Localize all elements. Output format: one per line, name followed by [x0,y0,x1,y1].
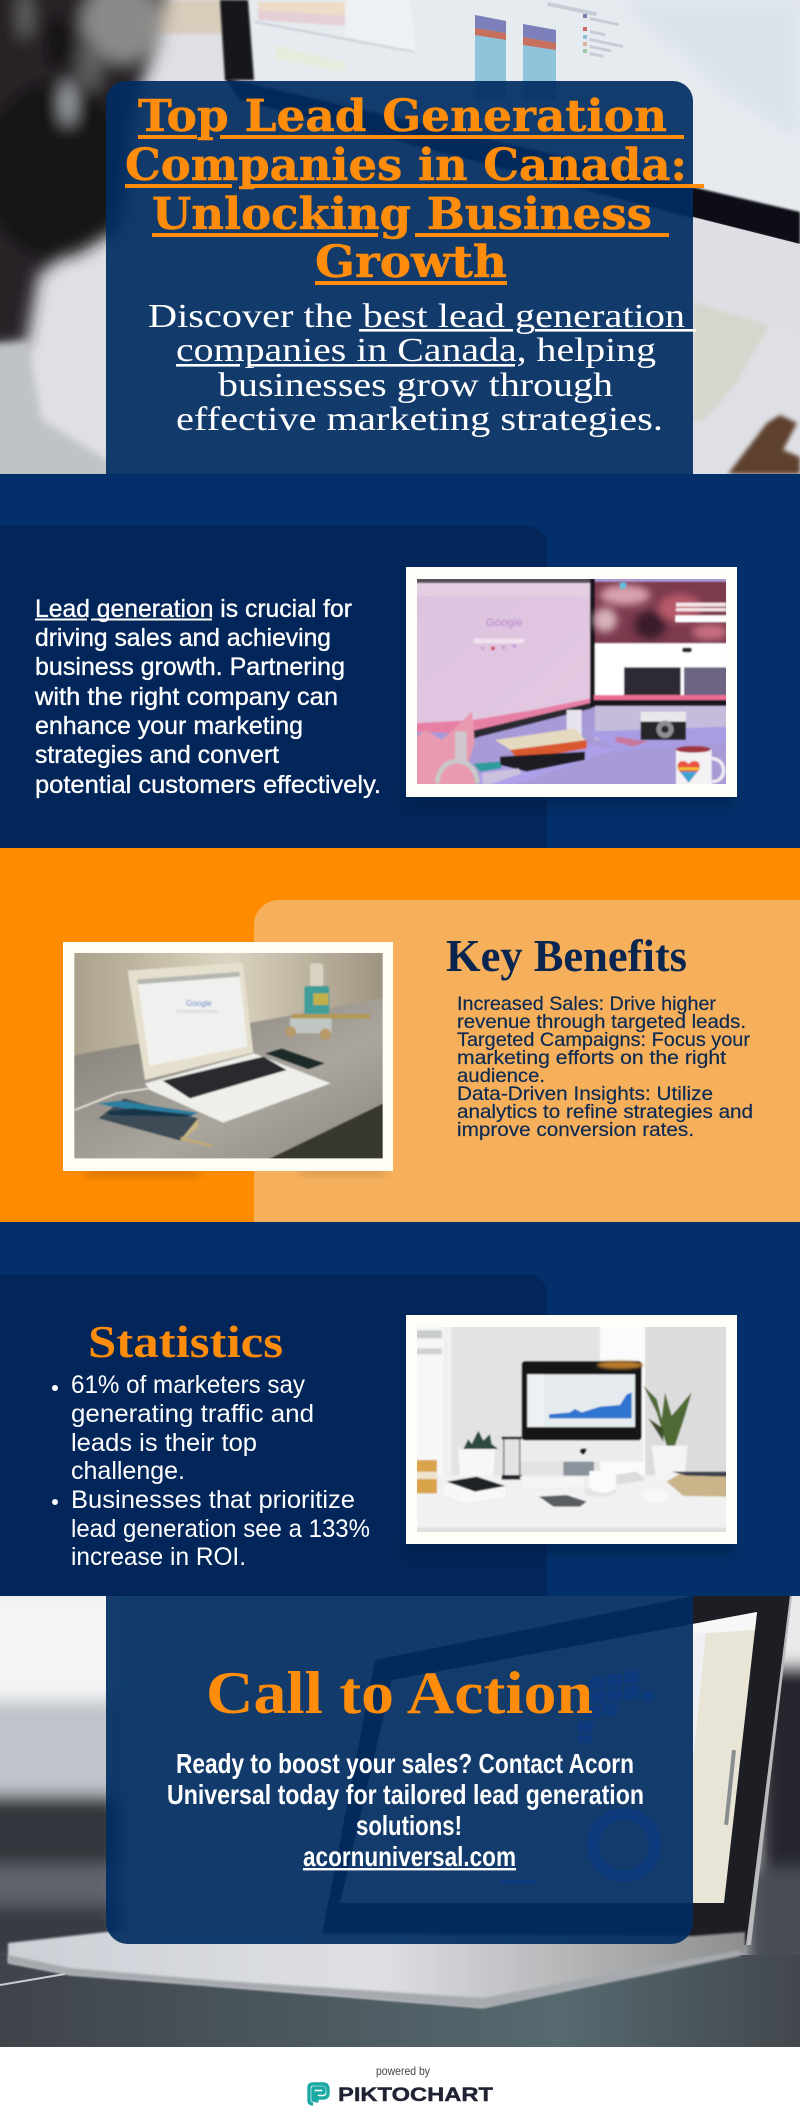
benefits list: analytics to refine strategies and [457,1101,753,1123]
benefits list: Data-Driven Insights: Utilize [457,1083,713,1105]
faint dashboard graphics on screen [500,1671,655,1883]
intro text: with the right company can [34,683,338,711]
intro text: driving sales and achieving [35,624,331,652]
hero photo: person at monitor [0,0,800,480]
hero section [0,0,800,480]
section: key benefits [0,848,800,1222]
benefits list: Targeted Campaigns: Focus your [457,1029,751,1051]
hero subtitle: Discover the best lead generation [148,298,685,335]
CTA text: Ready to boost your sales? Contact Acorn [176,1748,634,1779]
hero subtitle: companies in Canada, helping [176,332,656,369]
hero subtitle: businesses grow through [218,367,613,404]
benefits list: improve conversion rates. [457,1119,694,1141]
statistics list: 61% of marketers say [71,1371,305,1399]
chart bars on monitor [475,2,624,81]
hero subtitle: effective marketing strategies. [176,401,663,438]
key benefits heading: Key Benefits [446,930,687,981]
CTA text: solutions! [356,1810,462,1841]
statistics heading: Statistics [88,1316,283,1367]
benefits list: revenue through targeted leads. [457,1011,746,1033]
shirt [0,342,110,480]
CTA text [167,1748,644,1872]
hero title: Top Lead Generation [138,91,667,142]
intro text: strategies and convert [35,741,279,769]
statistics list: increase in ROI. [71,1543,246,1571]
statistics list [52,1371,370,1571]
intro text: Lead generation is crucial for [35,595,352,623]
hero title: Growth [315,237,507,288]
hand [728,415,800,474]
benefits list: audience. [457,1065,545,1087]
benefits list: Increased Sales: Drive higher [457,993,717,1015]
person head [0,0,168,350]
CTA text: acornuniversal.com [303,1841,516,1872]
photo frame: dual monitors desk [406,567,737,806]
statistics list: leads is their top [71,1429,257,1457]
Piktochart wordmark: PIKTOCHART [338,2084,493,2106]
intro dark panel [0,526,547,848]
section: intro [0,474,800,848]
CTA photo: laptop [0,1590,800,2058]
CTA heading: Call to Action [206,1660,593,1726]
hero title [125,91,704,288]
powered by label: powered by [376,2064,430,2078]
statistics list: lead generation see a 133% [71,1515,370,1543]
hero subtitle [148,298,696,438]
intro text: potential customers effectively. [35,771,381,799]
benefits light panel [254,900,800,1222]
photo frame: laptop on desk [63,942,393,1176]
intro text: enhance your marketing [35,712,303,740]
CTA translucent panel [106,1596,693,1944]
intro text [34,595,381,799]
photo frame: laptop on desk: Google [186,999,212,1008]
photo frame: dual monitors desk: Google [486,617,523,629]
hero title: Unlocking Business [152,189,652,240]
CTA text: Universal today for tailored lead generation [167,1779,644,1810]
footer [0,2047,800,2127]
statistics list: generating traffic and [71,1400,314,1428]
statistics dark panel [0,1274,547,1596]
benefits list [457,993,753,1141]
section: statistics [0,1222,800,1596]
hero translucent panel [106,81,693,474]
benefits list: marketing efforts on the right [457,1047,727,1069]
call to action section [0,1590,800,2058]
intro text: business growth. Partnering [35,653,345,681]
statistics list: Businesses that prioritize [71,1486,355,1514]
photo frame: iMac on white desk [406,1315,737,1554]
hero title: Companies in Canada: [125,140,687,191]
statistics list: challenge. [71,1457,185,1485]
Piktochart logo icon [309,2084,328,2104]
